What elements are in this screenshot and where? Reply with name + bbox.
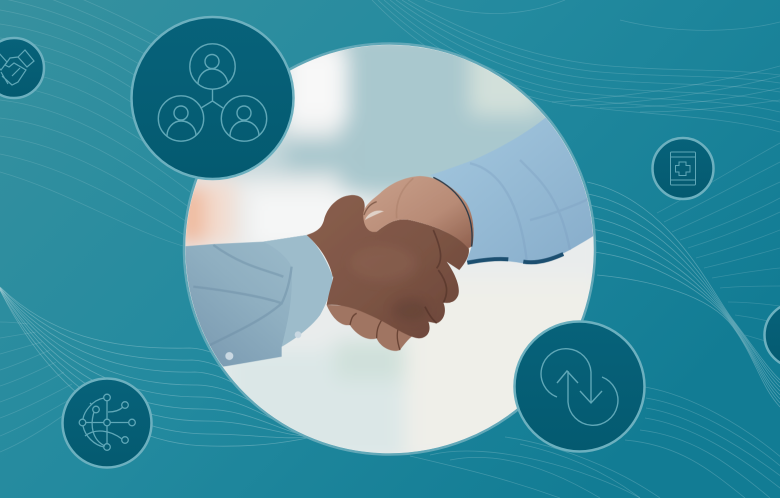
thumbnail [365, 210, 384, 220]
wave lines: bottom right [410, 387, 780, 498]
icon: up and down arrows [541, 349, 618, 425]
wave lines: top right [372, 0, 780, 132]
wave lines: right [587, 182, 780, 407]
left sleeve cuff [263, 235, 333, 347]
icon: phone with medical cross [670, 152, 696, 185]
badge: exchange arrows [514, 322, 644, 452]
left sleeve folds [193, 245, 292, 347]
hand: right hand [363, 176, 474, 248]
sleeves and hands [180, 117, 603, 367]
badge: global network [62, 378, 152, 468]
main photo circle ring [184, 44, 595, 454]
photo: handshake [186, 45, 593, 453]
right sleeve [430, 117, 603, 264]
knuckle creases [425, 230, 447, 323]
hand highlight [405, 266, 406, 268]
photo background blur [186, 45, 582, 453]
wave lines: top left [0, 0, 200, 248]
left sleeve [180, 235, 333, 367]
badge: people network [132, 17, 294, 179]
right sleeve shadow [467, 254, 563, 263]
lower fingers [327, 305, 417, 351]
wave lines: bottom left fan [0, 322, 76, 452]
right sleeve folds [470, 160, 576, 250]
badge: partial right [764, 302, 780, 368]
wrist edge [433, 177, 472, 247]
icon: handshake [0, 50, 34, 85]
icon: three connected people [158, 44, 267, 141]
hand: left hand back [307, 195, 469, 338]
wave lines: bottom left [0, 287, 312, 446]
badge: mobile health [652, 138, 714, 199]
wave lines: right fan [657, 143, 780, 346]
badge: handshake [0, 38, 44, 98]
icon: globe with nodes [79, 394, 135, 450]
